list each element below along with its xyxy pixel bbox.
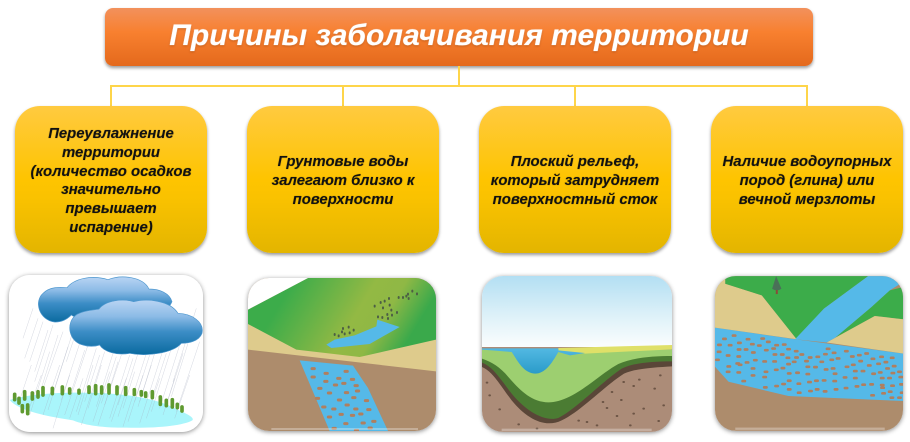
aquifer pebbles (312, 369, 375, 430)
illustration: flat relief basin (482, 276, 672, 432)
title banner (105, 8, 813, 66)
front cloud (70, 300, 202, 355)
yellow marsh strip (558, 345, 672, 354)
dark brown layer (482, 350, 672, 423)
brown clay base (715, 276, 903, 431)
illustration: groundwater near surface (248, 278, 436, 431)
cause card: impermeable rocks or permafrost: пород (глина) или (740, 173, 874, 189)
illustration: impermeable layer and permafrost (715, 276, 903, 431)
green slope (248, 278, 436, 357)
cause card: waterlogging by precipitation (15, 106, 207, 253)
cause card: waterlogging by precipitation: (количество осадков (30, 164, 191, 180)
cause card: waterlogging by precipitation: Переувлажнение (48, 126, 174, 142)
cause card: waterlogging by precipitation: превышает (65, 201, 157, 217)
reeds (15, 385, 182, 414)
illustration: rain clouds over a wetland (9, 275, 203, 432)
light green meadow (482, 350, 672, 402)
back cloud (38, 277, 172, 322)
right sand bank (827, 316, 903, 354)
dark green layer (482, 350, 672, 419)
cause card: flat relief: поверхностный сток (493, 192, 657, 208)
cause card: flat relief: который затрудняет (491, 173, 659, 189)
cause card: flat relief: Плоский рельеф, (511, 154, 639, 170)
cause card: waterlogging by precipitation: значительно (61, 182, 161, 198)
pond (10, 393, 193, 428)
tan sand layer (248, 321, 436, 371)
cause card: impermeable rocks or permafrost (711, 106, 903, 253)
cause card: groundwater close to surface (247, 106, 439, 253)
saturated blue layer (715, 328, 903, 401)
water surface and pond (482, 348, 585, 374)
right green hillside (835, 287, 903, 338)
rain streaks (18, 308, 200, 428)
pebbles in saturated layer (716, 336, 903, 398)
sky (482, 276, 672, 349)
river channel (795, 276, 903, 343)
soil specks (487, 375, 664, 429)
tree (772, 276, 781, 294)
cause card: flat relief (479, 106, 671, 253)
white sky corner (248, 278, 308, 310)
title banner: Причины заболачивания территории (169, 19, 749, 52)
cause card: groundwater close to surface: Грунтовые воды (278, 154, 408, 170)
cause card: impermeable rocks or permafrost: вечной мерзлоты (739, 192, 875, 208)
cause card: groundwater close to surface: поверхности (293, 192, 393, 208)
aquifer (300, 360, 388, 431)
lake (326, 320, 400, 348)
left sand bank (715, 276, 797, 339)
connector lines from title to cards (110, 66, 808, 106)
cause card: groundwater close to surface: залегают близко к (272, 173, 414, 189)
cause card: waterlogging by precipitation: испарение) (69, 220, 153, 236)
green hillside (725, 276, 868, 339)
cause card: impermeable rocks or permafrost: Наличие водоупорных (722, 154, 891, 170)
cause card: waterlogging by precipitation: территории (62, 145, 160, 161)
soil (482, 347, 672, 432)
marsh plants (335, 291, 417, 336)
